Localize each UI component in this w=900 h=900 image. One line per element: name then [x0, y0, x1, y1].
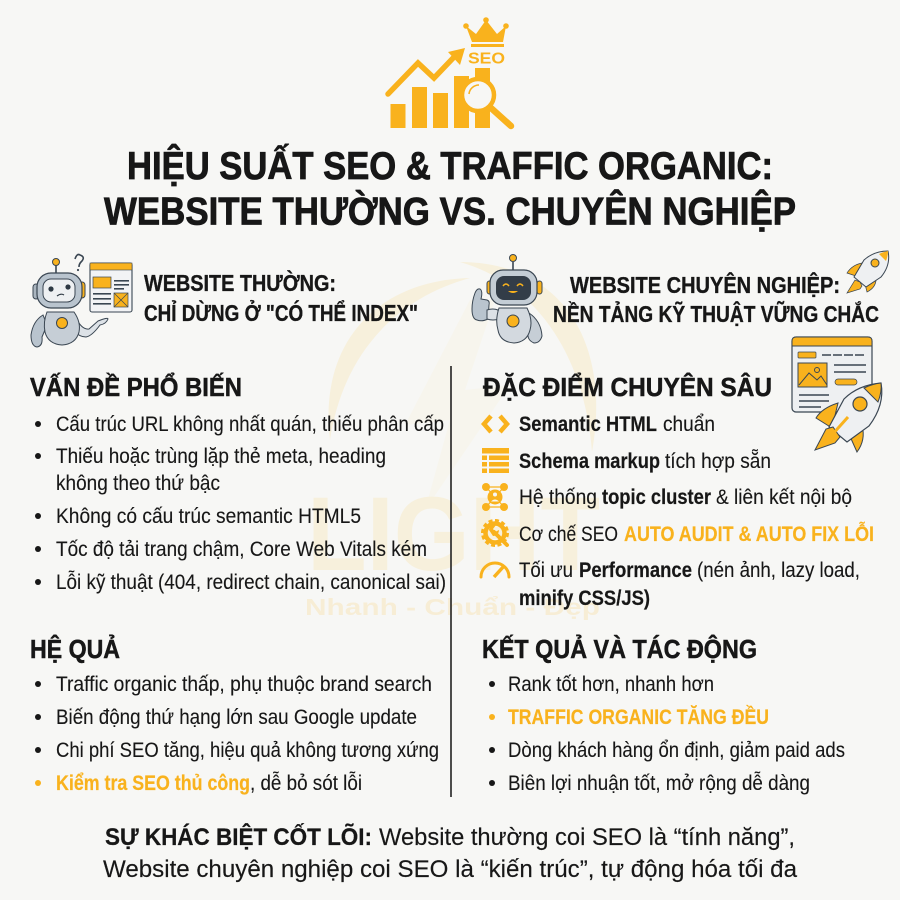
icon: SEO growth logo — [388, 17, 511, 128]
feature: schema markup: Schema markup — [519, 449, 660, 473]
title: WEBSITE THƯỜNG VS. CHUYÊN NGHIỆP — [104, 190, 796, 234]
feature: semantic html: Semantic HTML — [519, 412, 657, 436]
feature: performance: Performance — [579, 558, 692, 582]
feature: auto audit: Cơ chế SEO — [519, 522, 618, 546]
feature: topic cluster: topic cluster — [602, 485, 712, 509]
icon: confused robot with web page — [31, 254, 132, 347]
footer: core difference — [103, 823, 798, 883]
footer: core difference: Website chuyên nghiệp coi SEO là “kiến trúc”, tự động hóa tối đa — [103, 856, 798, 883]
icon: gear with wrench — [482, 520, 508, 546]
feature: auto audit — [519, 520, 874, 546]
bullet list: results — [489, 672, 845, 795]
panel heading: website chuyen nghiep: WEBSITE CHUYÊN NGHIỆP: — [570, 271, 840, 298]
footer: core difference: SỰ KHÁC BIỆT CỐT LÕI: — [105, 823, 372, 851]
bullet list: results: Biên lợi nhuận tốt, mở rộng dễ dàng — [508, 770, 810, 795]
bullet list: problems: Lỗi kỹ thuật (404, redirect chain, canonical sai) — [56, 569, 446, 594]
feature: performance: (nén ảnh, lazy load, — [697, 558, 860, 582]
bullet list: consequences: Biến động thứ hạng lớn sau Google update — [56, 705, 417, 729]
feature: schema markup: tích hợp sẵn — [665, 447, 771, 473]
icon: SEO growth logo: SEO — [468, 50, 505, 68]
icon: topic cluster — [482, 483, 508, 511]
icon: small rocket — [847, 251, 889, 293]
bullet list: problems: Tốc độ tải trang chậm, Core Web Vitals kém — [56, 537, 427, 561]
feature: schema markup — [519, 447, 771, 473]
bullet list: consequences: Kiểm tra SEO thủ công — [56, 771, 250, 795]
bullet list: results: Dòng khách hàng ổn định, giảm paid ads — [508, 738, 845, 762]
panel heading: website thuong: CHỈ DỪNG Ở "CÓ THỂ INDEX" — [144, 298, 418, 326]
panel: dac diem chuyen sau — [481, 372, 874, 610]
watermark: brand logo: LIGHT — [307, 476, 600, 593]
title — [104, 144, 796, 234]
feature: performance: minify CSS/JS) — [519, 586, 650, 610]
divider — [450, 366, 452, 797]
panel: ket qua va tac dong — [482, 634, 845, 795]
bullet list: consequences: Chi phí SEO tăng, hiệu quả không tương xứng — [56, 738, 439, 762]
bullet list: problems — [35, 412, 446, 594]
feature: performance — [519, 558, 860, 610]
icon: schema list — [482, 448, 509, 473]
panel: van de pho bien — [30, 372, 446, 594]
heading: dac diem chuyen sau: ĐẶC ĐIỂM CHUYÊN SÂU — [483, 372, 772, 402]
bullet list: results: Rank tốt hơn, nhanh hơn — [508, 672, 714, 696]
bullet list: consequences: , dễ bỏ sót lỗi — [250, 770, 362, 795]
bullet list: problems: Không có cấu trúc semantic HTML5 — [56, 504, 361, 528]
icon: code brackets — [484, 416, 507, 432]
icon: speedometer — [481, 563, 509, 577]
feature: semantic html: chuẩn — [663, 412, 715, 436]
watermark: brand logo: Nhanh - Chuẩn - Đẹp — [305, 594, 600, 620]
bullet list: problems: không theo thứ bậc — [56, 471, 220, 495]
title: HIỆU SUẤT SEO & TRAFFIC ORGANIC: — [127, 144, 773, 188]
bullet list: consequences: Traffic organic thấp, phụ thuộc brand search — [56, 672, 432, 696]
watermark: brand logo — [305, 262, 600, 620]
panel heading: website thuong — [144, 269, 418, 326]
footer: core difference: Website thường coi SEO là “tính năng”, — [379, 824, 795, 851]
panel heading: website thuong: WEBSITE THƯỜNG: — [144, 269, 336, 296]
feature: topic cluster — [519, 485, 852, 509]
illustration: web page and rocket — [792, 337, 882, 452]
bullet list: results: TRAFFIC ORGANIC TĂNG ĐỀU — [508, 704, 769, 729]
feature: topic cluster: & liên kết nội bộ — [716, 485, 852, 509]
bullet list: consequences — [35, 672, 439, 795]
heading: he qua: HỆ QUẢ — [30, 634, 120, 664]
heading: ket qua: KẾT QUẢ VÀ TÁC ĐỘNG — [482, 634, 757, 664]
panel: he qua — [30, 634, 439, 795]
bullet list: problems: Thiếu hoặc trùng lặp thẻ meta, heading — [56, 444, 386, 468]
feature: topic cluster: Hệ thống — [519, 485, 597, 509]
heading: van de pho bien: VẤN ĐỀ PHỔ BIẾN — [30, 372, 242, 402]
feature: performance: Tối ưu — [519, 558, 573, 582]
icon: happy robot thumbs up — [472, 254, 542, 343]
bullet list: problems: Cấu trúc URL không nhất quán, thiếu phân cấp — [56, 412, 444, 436]
panel heading: website chuyen nghiep — [553, 271, 879, 327]
